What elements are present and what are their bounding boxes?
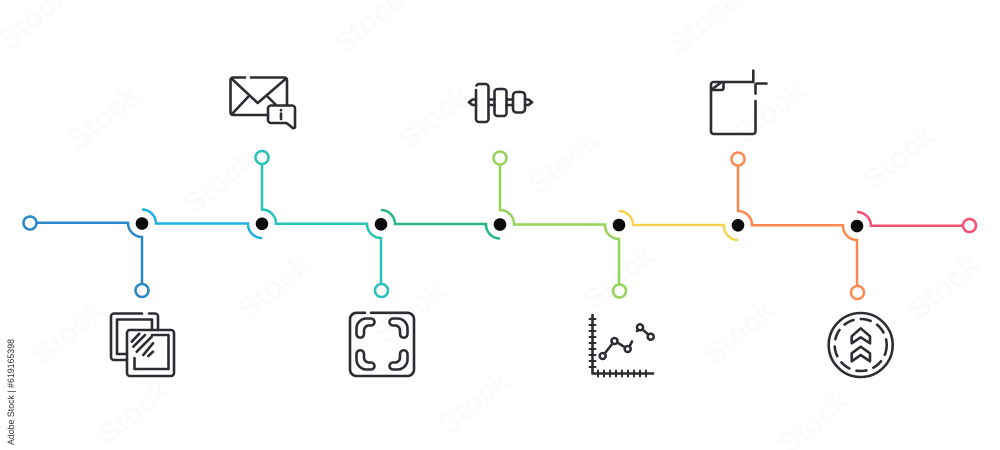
segment 8: red end — [857, 212, 976, 232]
icon: double chevron in dashed circle — [829, 313, 893, 377]
timeline — [24, 151, 976, 299]
text: Stock — [92, 374, 176, 450]
segment 2: cyan connector — [142, 210, 262, 238]
icon: line chart with ticked axes — [590, 315, 654, 376]
text: Stock — [62, 79, 146, 157]
text: Stock — [367, 274, 451, 352]
text: Stock — [902, 249, 986, 327]
icon: overlapping squares — [111, 314, 174, 376]
segment 4: green connector — [381, 210, 500, 238]
segment 1: blue start and lower branch — [24, 216, 148, 297]
text: Stock — [27, 294, 111, 372]
icon: envelope with info bubble — [230, 78, 295, 128]
segment 6: yellow connector — [619, 211, 738, 240]
stock credit text: Adobe Stock | #619165398 — [6, 339, 16, 445]
segment 3: teal upper and lower branch — [256, 151, 388, 297]
text: Stock — [432, 364, 516, 442]
icon: fullscreen corners in rounded square — [350, 313, 414, 376]
segment 5: lime upper and lower branch — [494, 152, 626, 298]
text: Stock — [392, 79, 476, 157]
text: Stock — [727, 74, 811, 152]
text: Stock — [857, 119, 941, 197]
timeline nodes — [136, 217, 863, 232]
text: Stock — [697, 294, 781, 372]
text: Stock — [177, 144, 261, 222]
icon: barbell bars — [469, 84, 532, 122]
segment 7: orange upper and lower branch — [732, 152, 864, 299]
text: Stock — [577, 239, 661, 317]
text: Stock — [522, 124, 606, 202]
icon: document with crop plus — [711, 70, 766, 134]
text: Stock — [232, 249, 316, 327]
